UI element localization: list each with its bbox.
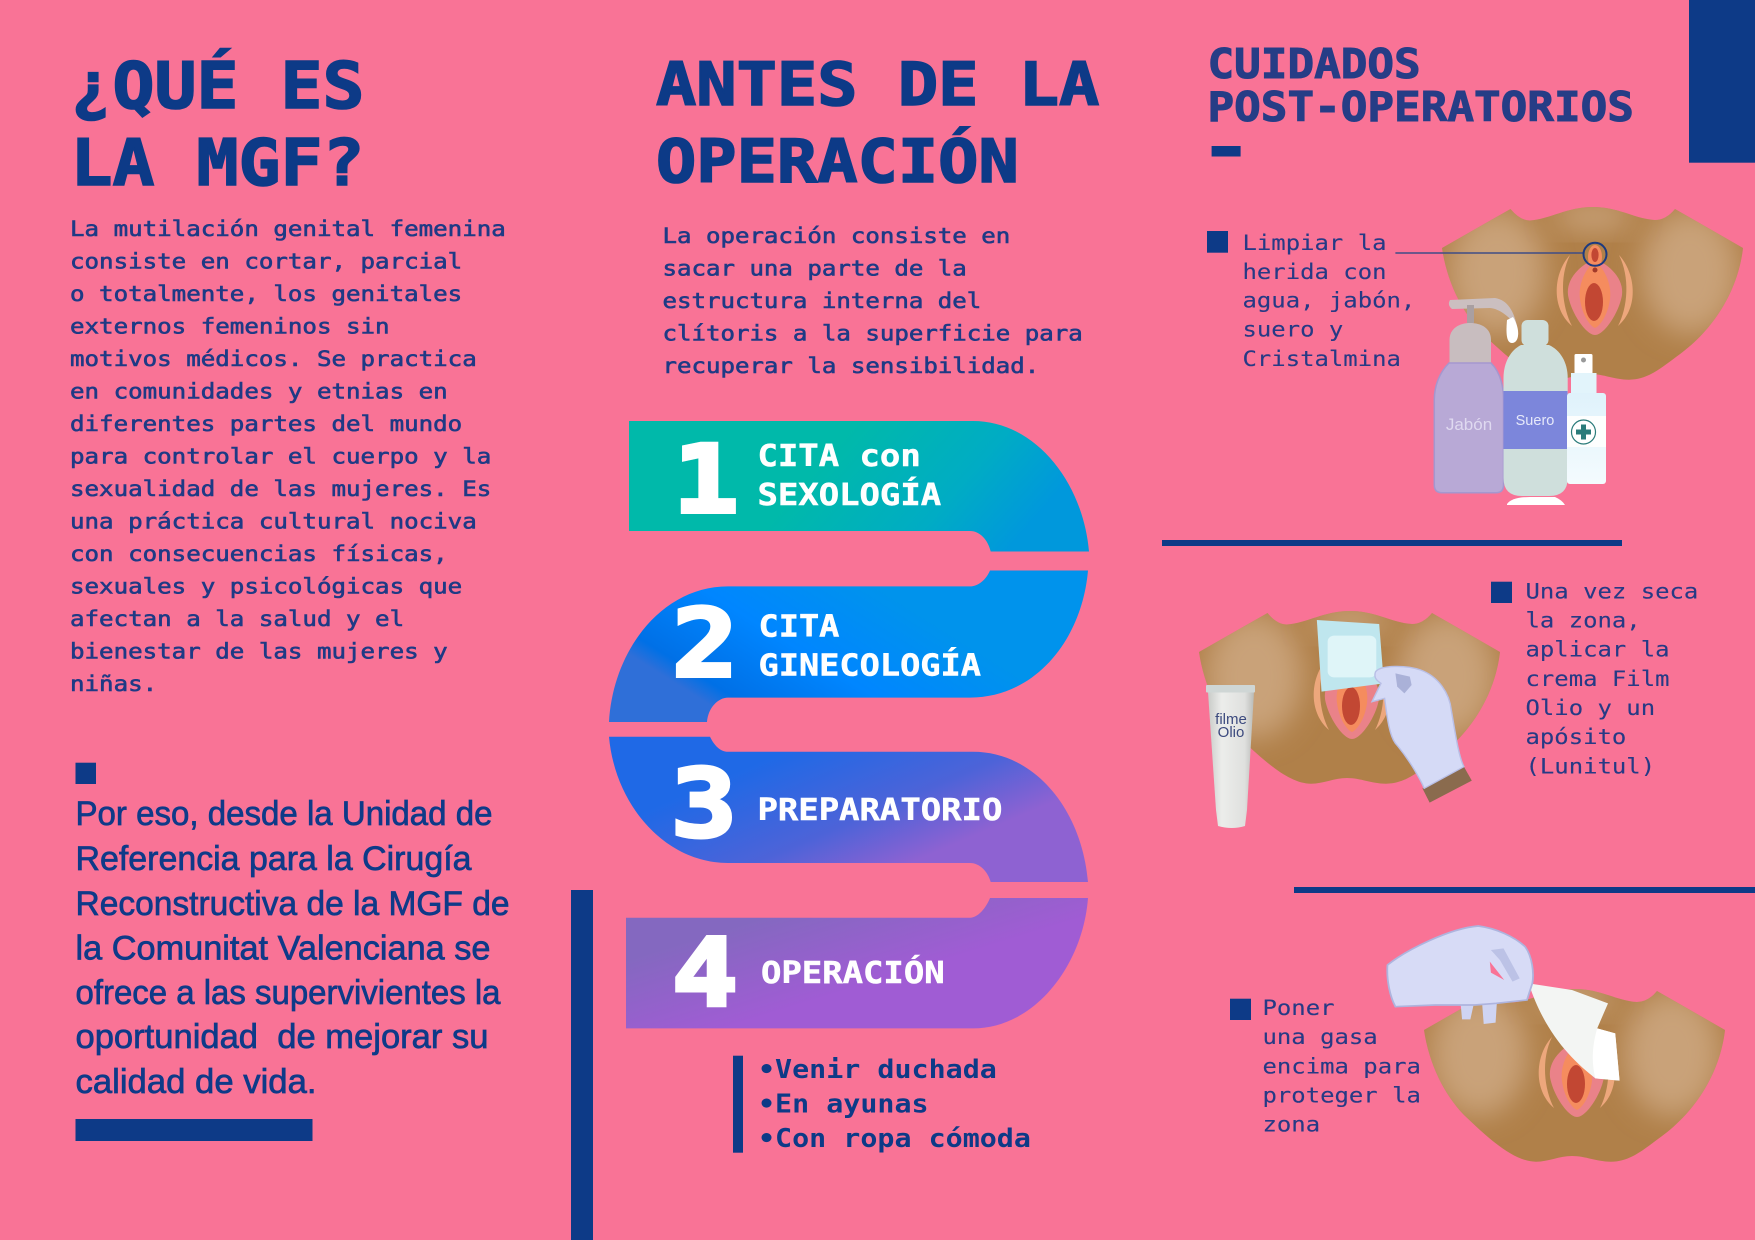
step 2: cita ginecología: GINECOLOGÍA xyxy=(758,647,981,683)
step 1: cita con sexología: 1 xyxy=(673,426,739,535)
callout line and circle xyxy=(1395,243,1606,266)
step 3: preparatorio: PREPARATORIO xyxy=(758,792,1002,827)
top right corner block xyxy=(1689,0,1755,163)
text block: definition of FGM: sexuales y psicológicas que xyxy=(70,575,462,599)
text block: definition of FGM: en comunidades y etnias en xyxy=(70,380,448,404)
column divider bar xyxy=(571,890,593,1240)
icon: soap bottle xyxy=(1434,298,1518,493)
accent bar under statement xyxy=(76,1119,312,1141)
icon: filme olio tube: Olio xyxy=(1218,724,1244,741)
care step 1 text: suero y xyxy=(1242,318,1343,342)
title: cuidados post-operatorios: CUIDADOS xyxy=(1208,41,1421,89)
text block: unit statement: Reconstructiva de la MGF de xyxy=(76,885,510,923)
text block: unit statement: calidad de vida. xyxy=(76,1063,316,1101)
care step 2 text: apósito xyxy=(1526,725,1626,750)
care step 3 text: proteger la xyxy=(1262,1083,1421,1108)
text block: definition of FGM: niñas. xyxy=(70,672,157,697)
bullet list: preparation instructions: •En ayunas xyxy=(758,1090,929,1119)
step 4: operación: OPERACIÓN xyxy=(761,954,945,990)
text block: operation description: La operación consiste en xyxy=(662,224,1010,249)
title: cuidados post-operatorios: POST-OPERATORIOS xyxy=(1208,84,1634,132)
care step 1 text: herida con xyxy=(1242,260,1386,285)
divider 1 xyxy=(1162,540,1622,546)
icon: filme olio tube xyxy=(1206,685,1255,828)
bullet list bar xyxy=(733,1056,743,1153)
text block: unit statement: ofrece a las supervivientes la xyxy=(76,974,501,1012)
step 4: operación xyxy=(626,898,1088,1028)
care step 1 marker xyxy=(1207,231,1228,253)
text block: definition of FGM: externos femeninos sin xyxy=(70,315,390,339)
text block: unit statement: Por eso, desde la Unidad de xyxy=(76,795,492,833)
text block: definition of FGM: La mutilación genital femenina xyxy=(70,217,506,242)
title: qué es la MGF: ¿QUÉ ES xyxy=(70,48,364,123)
care step 2 text: la zona, xyxy=(1526,609,1641,633)
title: antes de la operación: OPERACIÓN xyxy=(656,125,1019,196)
text block: definition of FGM: diferentes partes del mundo xyxy=(70,412,462,437)
text block: definition of FGM: bienestar de las mujeres y xyxy=(70,640,448,664)
title trailing dash xyxy=(1212,146,1241,156)
bullet list: preparation instructions: •Con ropa cómoda xyxy=(758,1124,1031,1154)
care step 3 marker xyxy=(1230,999,1251,1020)
icon: gauze and gloved hand xyxy=(1387,926,1620,1081)
step 2: cita ginecología: 2 xyxy=(672,590,738,699)
text block: definition of FGM: motivos médicos. Se practica xyxy=(70,347,477,372)
care step 3 text: zona xyxy=(1262,1113,1320,1137)
text block: operation description: clítoris a la superficie para xyxy=(662,322,1083,346)
title: antes de la operación: ANTES DE LA xyxy=(656,49,1099,119)
step 3: preparatorio: 3 xyxy=(671,750,737,859)
anatomical illustration 2 xyxy=(1199,607,1500,784)
text block: definition of FGM: sexualidad de las mujeres. Es xyxy=(70,477,491,502)
icon: filme olio tube: filme xyxy=(1215,711,1247,728)
care step 2 text: Una vez seca xyxy=(1526,580,1698,604)
text block: definition of FGM: con consecuencias físicas, xyxy=(70,542,448,567)
text block: definition of FGM: afectan a la salud y el xyxy=(70,607,404,632)
icon: antiseptic spray xyxy=(1567,354,1606,484)
care step 2 text: Olio y un xyxy=(1526,696,1655,721)
title: qué es la MGF: LA MGF? xyxy=(70,126,364,200)
text block: definition of FGM: una práctica cultural nociva xyxy=(70,510,477,534)
step 2: cita ginecología xyxy=(609,570,1088,722)
care step 2 text: crema Film xyxy=(1526,667,1669,692)
text block: unit statement: la Comunitat Valenciana se xyxy=(76,929,490,967)
step 4: operación: 4 xyxy=(672,919,738,1028)
care step 1 text: Cristalmina xyxy=(1242,347,1401,372)
step 1: cita con sexología: CITA con xyxy=(758,438,921,473)
text block: operation description: recuperar la sensibilidad. xyxy=(662,354,1039,379)
anatomical illustration 1 xyxy=(1442,203,1743,380)
care step 3 text: encima para xyxy=(1262,1054,1421,1079)
step 2: cita ginecología: CITA xyxy=(758,608,839,644)
text block: unit statement xyxy=(76,795,510,1101)
bullet list: preparation instructions: •Venir duchada xyxy=(758,1055,997,1085)
marker square xyxy=(76,763,96,784)
care step 1 text: Limpiar la xyxy=(1242,231,1386,256)
care step 2 marker xyxy=(1491,582,1512,603)
step 1: cita con sexología: SEXOLOGÍA xyxy=(758,477,941,512)
step 3: preparatorio xyxy=(609,737,1088,882)
anatomical illustration 3 xyxy=(1424,985,1725,1162)
text block: definition of FGM: consiste en cortar, parcial xyxy=(70,250,462,274)
text block: definition of FGM: o totalmente, los genitales xyxy=(70,282,462,307)
divider 2 xyxy=(1294,887,1755,893)
care step 1 text: agua, jabón, xyxy=(1242,289,1415,313)
text block: unit statement: oportunidad de mejorar su xyxy=(76,1018,489,1056)
step 1: cita con sexología xyxy=(629,421,1089,552)
text block: unit statement: Referencia para la Cirugía xyxy=(76,840,472,878)
care step 3 text: Poner xyxy=(1262,996,1334,1021)
care step 3 text: una gasa xyxy=(1262,1025,1378,1050)
care step 2 text: (Lunitul) xyxy=(1526,755,1655,779)
icon: saline bottle: Suero xyxy=(1516,413,1554,429)
icon: soap bottle: Jabón xyxy=(1446,415,1492,434)
text block: operation description: sacar una parte de la xyxy=(662,257,967,281)
text block: definition of FGM: para controlar el cuerpo y la xyxy=(70,445,491,469)
care step 2 text: aplicar la xyxy=(1526,638,1669,662)
icon: dressing and gloved hand xyxy=(1317,620,1472,803)
text block: operation description: estructura interna del xyxy=(662,289,981,314)
icon: saline bottle xyxy=(1504,320,1568,505)
